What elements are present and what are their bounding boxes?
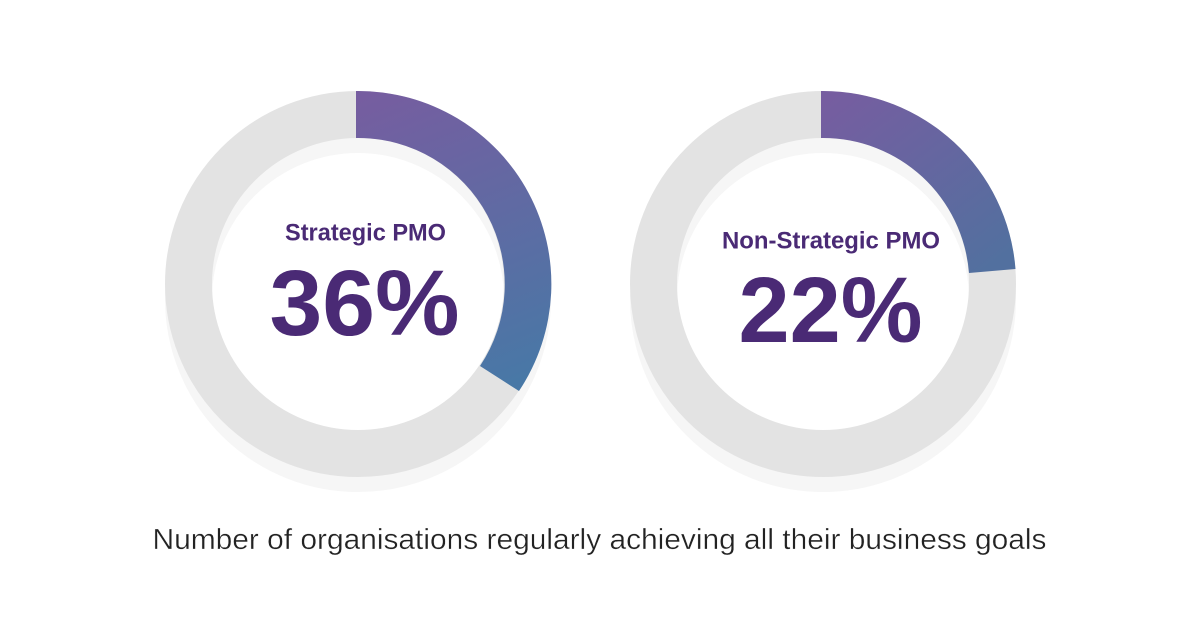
caption: Number of organisations regularly achieving all their business goals	[152, 524, 1046, 556]
arc: 36% segment	[356, 91, 551, 391]
donut chart: Strategic PMO 36%	[188, 91, 551, 468]
label: Non-Strategic PMO: Non-Strategic PMO	[722, 228, 940, 254]
value: 36%: 36%	[270, 251, 460, 355]
label: Strategic PMO: Strategic PMO	[285, 220, 446, 246]
value: 22%: 22%	[738, 258, 922, 362]
arc: 22% segment	[821, 91, 1016, 273]
donut chart: Non-Strategic PMO 22%	[654, 91, 1016, 468]
